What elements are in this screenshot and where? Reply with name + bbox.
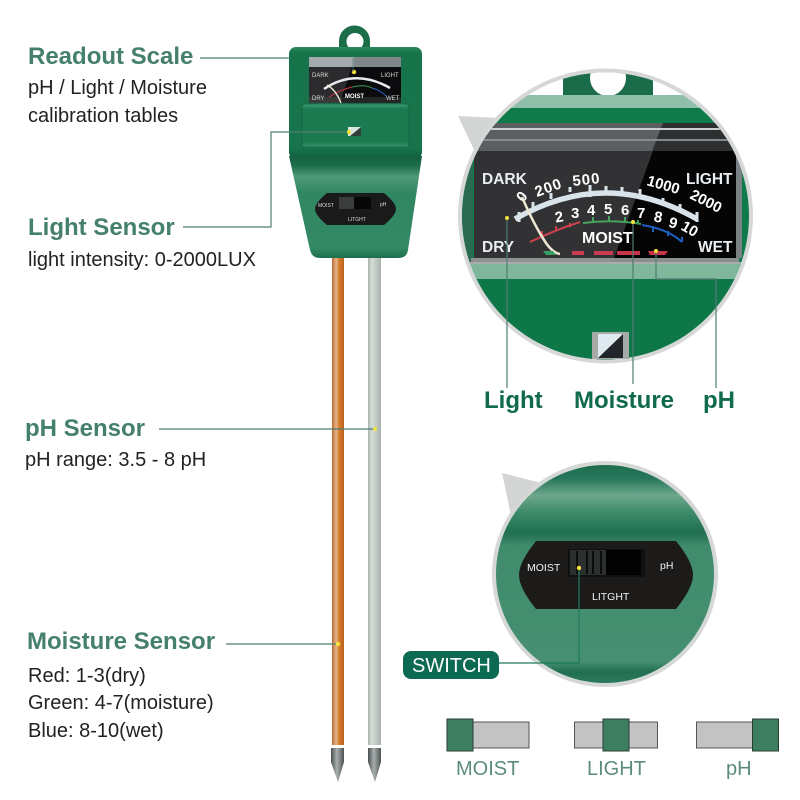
meter window	[309, 57, 401, 103]
label: pH: pH	[703, 387, 735, 414]
meter window: MOIST	[345, 94, 364, 100]
switch position: LIGHT: LIGHT	[587, 758, 646, 780]
callout: moisture sensor: Red: 1-3(dry)	[28, 665, 146, 687]
moisture numbers: 2	[554, 208, 565, 227]
moisture numbers: 3	[571, 205, 579, 222]
meter window: DARK	[312, 73, 329, 79]
moisture numbers: 9	[667, 214, 679, 233]
slider slot	[568, 549, 645, 577]
zoomed meter window: 200	[533, 175, 565, 201]
zoomed meter window: LIGHT	[686, 171, 733, 188]
zoom lens: mode switch: LITGHT	[592, 591, 630, 603]
copper moisture probe	[331, 255, 344, 782]
switch position: MOIST	[447, 719, 529, 780]
callout: readout scale: pH / Light / Moisture	[28, 77, 207, 99]
zoomed meter window: 500	[572, 170, 601, 190]
callout: light sensor: Light Sensor	[28, 214, 175, 241]
zoomed sensor icon	[592, 332, 629, 359]
mode switch panel	[315, 193, 396, 225]
label: Light: Light	[484, 387, 543, 414]
switch position: pH	[696, 719, 778, 780]
switch position: MOIST: MOIST	[456, 758, 519, 780]
zoomed loop	[563, 73, 653, 95]
leader lines	[505, 216, 716, 388]
scale bars	[543, 251, 556, 255]
mode switch panel: pH	[380, 202, 387, 208]
switch badge	[403, 651, 499, 679]
black switch panel	[519, 541, 693, 609]
callout: readout scale: calibration tables	[28, 105, 178, 127]
moisture numbers: 6	[621, 202, 629, 219]
sensor cover	[302, 104, 409, 147]
switch badge: SWITCH	[412, 655, 491, 677]
moisture numbers: 8	[652, 208, 664, 227]
callout: readout scale: Readout Scale	[28, 43, 193, 70]
zoom lens: mode switch: MOIST	[527, 562, 561, 574]
zoomed meter window: DRY	[482, 239, 515, 256]
zoom lens: meter scale	[458, 68, 753, 413]
mode switch panel: LITGHT	[348, 217, 366, 223]
meter window: WET	[386, 96, 400, 102]
callout: readout scale	[28, 43, 353, 127]
zoomed meter window: 2000	[687, 186, 725, 217]
zoom lens: mode switch: pH	[660, 560, 673, 572]
zoomed meter window: DARK	[482, 171, 528, 188]
lens pointer	[458, 116, 500, 158]
callout: light sensor: light intensity: 0-2000LUX	[28, 249, 256, 271]
zoomed meter window: 0	[513, 188, 531, 206]
zoom lens: mode switch	[403, 461, 718, 687]
needle	[522, 197, 560, 254]
callout: moisture sensor	[27, 628, 340, 742]
callout: pH sensor: pH range: 3.5 - 8 pH	[25, 449, 206, 471]
lens pointer	[502, 473, 545, 520]
glass highlight	[474, 123, 663, 264]
soil meter device	[289, 25, 422, 258]
callout: pH sensor: pH Sensor	[25, 415, 145, 442]
callout: light sensor	[28, 132, 346, 271]
colored moisture arcs	[530, 222, 580, 242]
lens ring	[458, 68, 753, 364]
moisture numbers: 5	[604, 201, 612, 218]
zoomed meter window: MOIST	[582, 230, 633, 247]
mode switch panel: MOIST	[318, 203, 334, 209]
tapered lower body	[289, 156, 422, 258]
lens ring	[492, 461, 718, 687]
meter window: DRY	[312, 96, 325, 102]
zoomed meter window: WET	[698, 239, 733, 256]
switch position: pH: pH	[726, 758, 752, 780]
meter window: LIGHT	[381, 73, 399, 79]
slider knob	[570, 550, 606, 575]
callout: moisture sensor: Blue: 8-10(wet)	[28, 720, 164, 742]
light scale arc	[515, 193, 697, 219]
moisture numbers: 4	[587, 202, 596, 219]
callout: moisture sensor: Moisture Sensor	[27, 628, 215, 655]
callout: moisture sensor: Green: 4-7(moisture)	[28, 692, 214, 714]
light sensor icon	[347, 127, 361, 136]
silver pH probe	[368, 255, 381, 782]
meter head	[289, 47, 422, 159]
switch position: LIGHT	[574, 719, 658, 780]
moisture numbers	[555, 204, 698, 236]
label: Moisture: Moisture	[574, 387, 674, 414]
callout: pH sensor	[25, 415, 377, 471]
zoomed meter window: 1000	[645, 173, 682, 198]
moisture numbers: 7	[637, 205, 645, 222]
hanging loop	[339, 25, 370, 50]
zoomed meter window	[471, 123, 742, 264]
moisture numbers: 10	[678, 218, 701, 241]
